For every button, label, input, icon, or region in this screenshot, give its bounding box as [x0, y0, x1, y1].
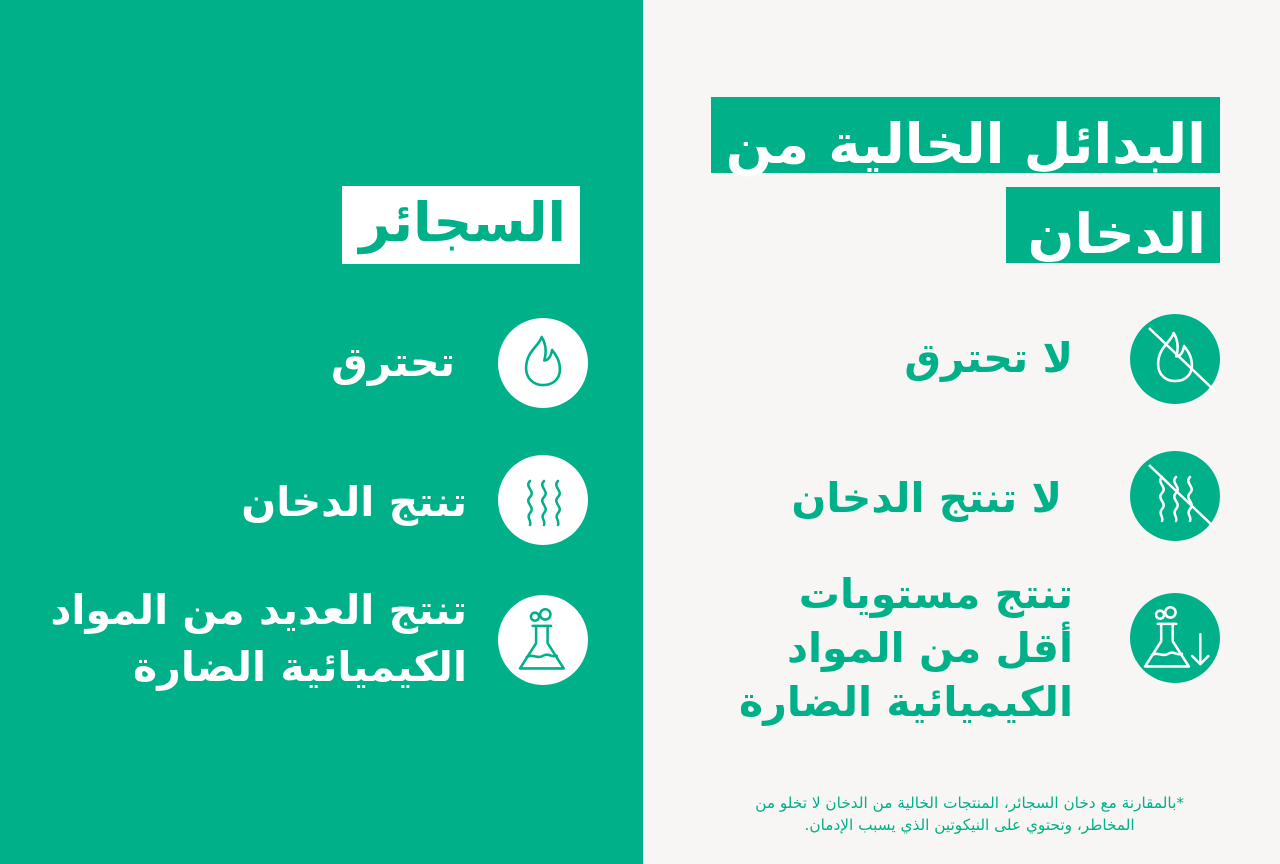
- heading: cigarettes: السجائر: [359, 191, 566, 254]
- panel: cigarettes (left): [0, 0, 643, 864]
- footnote: *بالمقارنة مع دخان السجائر، المنتجات الخالية من الدخان لا تخلو من: [755, 794, 1184, 812]
- text: no combustion: لا تحترق: [904, 334, 1073, 382]
- panel: smoke-free alternatives (right): [711, 97, 1220, 834]
- text: many harmful chemicals: تنتج العديد من المواد: [50, 586, 467, 634]
- heading: smoke-free alternatives: [711, 97, 1220, 266]
- text: no smoke: لا تنتج الدخان: [791, 474, 1062, 522]
- footnote: [755, 794, 1184, 834]
- text: many harmful chemicals: [50, 586, 467, 691]
- icon: smoke: [498, 455, 588, 545]
- text: lower levels of harmful chemicals: تنتج مستويات: [799, 570, 1073, 618]
- text: many harmful chemicals: الكيميائية الضارة: [133, 643, 467, 691]
- heading: smoke-free alternatives: الدخان: [1027, 202, 1206, 266]
- icon: flask: [498, 595, 588, 685]
- text: combustion: تحترق: [331, 338, 455, 386]
- text: lower levels of harmful chemicals: أقل من المواد: [787, 624, 1073, 672]
- icon: no flame: [1130, 314, 1220, 404]
- icon: flask with down arrow: [1130, 593, 1220, 683]
- text: produces smoke: تنتج الدخان: [241, 478, 467, 526]
- heading: smoke-free alternatives: البدائل الخالية من: [726, 112, 1206, 176]
- text: lower levels of harmful chemicals: الكيميائية الضارة: [739, 678, 1073, 726]
- icon: no smoke: [1130, 451, 1220, 541]
- footnote: المخاطر، وتحتوي على النيكوتين الذي يسبب الإدمان.: [804, 816, 1135, 834]
- text: lower levels of harmful chemicals: [739, 570, 1073, 726]
- icon: flame: [498, 318, 588, 408]
